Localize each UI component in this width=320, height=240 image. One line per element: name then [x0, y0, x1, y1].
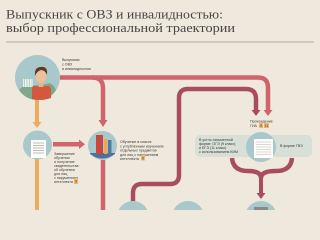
- text: certificate study description: и получение: [54, 160, 75, 164]
- line: orange from certificate down: [35, 159, 39, 210]
- arrow: red line from graduate to the top right and classes: [60, 78, 272, 210]
- text: classes description: интеллекта: [120, 157, 139, 161]
- text: graduate label: [62, 58, 91, 71]
- text: certificate study description: интеллекта: [54, 180, 73, 184]
- icon: bottom circle right: [245, 201, 277, 233]
- text: certificate study description: обучения: [54, 156, 70, 160]
- text: classes description: отдельных предметов: [120, 149, 157, 153]
- text: graduate label: Выпускник: [62, 58, 80, 62]
- text: classes description: Обучение в классе: [120, 140, 152, 144]
- icon: certificate document: [23, 130, 52, 160]
- text: certificate study description: с нарушением: [54, 176, 78, 180]
- panel: left exam form: форме: ОГЭ (9 класс): [199, 142, 235, 146]
- icon: bottom circle middle: [172, 201, 204, 233]
- text: certificate study description: 9: [75, 180, 77, 184]
- text: exam label: Прохождение: [250, 120, 273, 124]
- title: выбор профессиональной траектории: [6, 20, 235, 35]
- text: classes description: с углублённым изучением: [120, 144, 164, 148]
- arrow: exam forms merge: [232, 158, 292, 199]
- arrow: orange from graduate to certificate: [32, 100, 42, 128]
- text: graduate label: и инвалидностью: [62, 67, 91, 71]
- text: certificate study description: об обучении: [54, 168, 75, 172]
- text: certificate study description: свидетельства: [54, 164, 78, 168]
- text: classes description: 9: [142, 156, 144, 160]
- arrow: certificate to classes: [53, 140, 85, 149]
- icon: books: [88, 131, 117, 160]
- title: [6, 6, 235, 35]
- text: certificate study description: [54, 152, 78, 184]
- panel: left exam form: В устно-письменной: [199, 138, 233, 142]
- text: certificate study description: Завершение: [54, 152, 75, 156]
- text: classes description: для лиц с нарушением: [120, 153, 159, 157]
- panel: left exam form: [195, 135, 255, 157]
- text: exam label: ГИА: [250, 124, 258, 128]
- icon: exam form document: [246, 132, 276, 162]
- panel: left exam form: с использованием КИМ: [199, 150, 238, 154]
- panel: right exam form: В форме ГВЭ: [280, 144, 303, 148]
- panel: right exam form: [268, 135, 312, 157]
- title: Выпускник с ОВЗ и инвалидностью:: [6, 6, 223, 22]
- text: certificate study description: для лиц: [54, 172, 67, 176]
- text: classes description: [120, 140, 164, 161]
- icon: bottom circle left: [117, 201, 149, 233]
- panel: left exam form: и ЕГЭ (11 класс): [199, 146, 226, 150]
- text: exam label: 9: [260, 124, 262, 128]
- arrow: dark red line to exam: [133, 89, 260, 201]
- text: exam label: [250, 120, 273, 128]
- icon: graduate portrait: [15, 55, 60, 100]
- text: exam label: 11: [264, 124, 268, 128]
- text: graduate label: с ОВЗ: [62, 62, 72, 66]
